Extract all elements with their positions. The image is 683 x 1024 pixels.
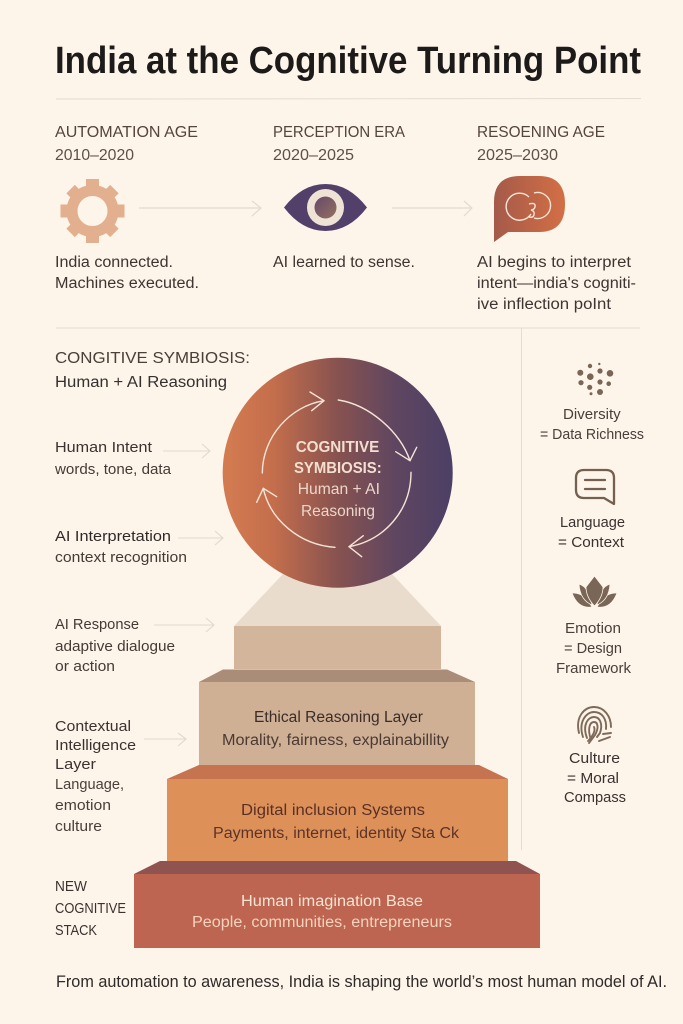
pyramid: digital inclusion systems: Digital inclusion Systems xyxy=(241,802,425,819)
sidebar: culture xyxy=(564,707,626,806)
icon: gear xyxy=(60,179,124,243)
dates: 2025–2030: 2025–2030 xyxy=(477,147,558,164)
timeline: automation age xyxy=(55,124,199,292)
label: AI interpretation: context recognition xyxy=(55,549,187,566)
label: AI response: or action xyxy=(55,658,115,675)
section heading: CONGITIVE SYMBIOSIS: xyxy=(55,350,250,367)
pyramid: ethical reasoning layer: Morality, fairness, explainabillity xyxy=(222,732,449,749)
sidebar: diversity xyxy=(540,363,644,443)
timeline: perception era xyxy=(273,124,415,271)
timeline: reasoning age xyxy=(477,124,636,313)
cognitive symbiosis orb xyxy=(223,358,453,588)
footer statement: From automation to awareness, India is shaping the world’s most human model of AI. xyxy=(56,973,667,991)
title: India at the Cognitive Turning Point xyxy=(55,40,641,82)
label: AI response: adaptive dialogue xyxy=(55,638,175,655)
sidebar: emotion: Framework xyxy=(556,661,632,677)
sidebar: language xyxy=(558,470,625,551)
heading: reasoning age: RESOENING AGE xyxy=(477,124,605,141)
pyramid: human imagination base: People, communities, entrepreneurs xyxy=(192,914,452,931)
pyramid: top block xyxy=(234,626,441,669)
icon: eye xyxy=(284,184,367,231)
label: AI interpretation: AI Interpretation xyxy=(55,528,171,545)
orb text: SYMBIOSIS: xyxy=(294,460,382,477)
icon: lotus xyxy=(572,576,617,607)
label: human intent xyxy=(54,439,210,478)
cycle arrows xyxy=(257,392,417,557)
sidebar: emotion xyxy=(556,576,632,677)
description xyxy=(477,254,636,313)
pyramid: digital inclusion systems: Payments, internet, identity Sta Ck xyxy=(213,825,459,842)
sidebar: culture: Culture xyxy=(569,751,620,767)
pyramid: human imagination base: Human imagination Base xyxy=(241,893,423,910)
arrow xyxy=(178,531,223,545)
pyramid: apex glow xyxy=(234,574,441,626)
pyramid: ethical reasoning layer: Ethical Reasoning Layer xyxy=(254,709,423,726)
label: contextual intelligence layer: Language, xyxy=(55,776,124,793)
pyramid: ethical reasoning layer xyxy=(199,670,475,765)
section heading: Human + AI Reasoning xyxy=(55,374,227,391)
label: new cognitive stack xyxy=(55,879,126,939)
label: AI response xyxy=(55,616,214,675)
heading: perception era: PERCEPTION ERA xyxy=(273,124,405,141)
description: AI learned to sense. xyxy=(273,254,415,271)
label: contextual intelligence layer: culture xyxy=(55,818,102,835)
sidebar: emotion: = Design xyxy=(564,641,622,657)
label: new cognitive stack: STACK xyxy=(55,923,97,939)
sidebar: diversity: Diversity xyxy=(563,407,621,423)
label: new cognitive stack: NEW xyxy=(55,879,87,895)
sidebar: culture: = Moral xyxy=(567,771,619,787)
label: new cognitive stack: COGNITIVE xyxy=(55,901,126,917)
description: intent—india's cogniti- xyxy=(477,275,636,292)
orb text: Human + AI xyxy=(298,481,380,498)
dates: 2020–2025: 2020–2025 xyxy=(273,147,354,164)
sidebar: language: = Context xyxy=(558,535,624,551)
description xyxy=(55,254,199,292)
icon: chat bubble xyxy=(576,470,614,504)
arrow xyxy=(163,444,210,458)
heading: automation age: AUTOMATION AGE xyxy=(55,124,198,141)
orb text: COGNITIVE xyxy=(296,439,380,456)
sidebar: culture: Compass xyxy=(564,790,626,806)
sidebar: emotion: Emotion xyxy=(565,621,621,637)
icon: data dots xyxy=(577,363,613,395)
label: contextual intelligence layer xyxy=(55,718,186,835)
description: Machines executed. xyxy=(55,275,199,292)
section heading xyxy=(55,350,250,391)
icon: fingerprint xyxy=(578,707,611,743)
label: contextual intelligence layer: Layer xyxy=(55,756,96,773)
pyramid: human imagination base xyxy=(134,861,540,948)
label: human intent: words, tone, data xyxy=(54,461,172,478)
arrow: automation to perception xyxy=(139,201,261,216)
orb text: Reasoning xyxy=(301,503,375,520)
sidebar: diversity: = Data Richness xyxy=(540,427,644,443)
label: contextual intelligence layer: Intelligence xyxy=(55,737,136,754)
arrow: perception to reasoning xyxy=(392,201,472,216)
label: contextual intelligence layer: Contextual xyxy=(55,718,131,735)
label: AI response: AI Response xyxy=(55,616,139,633)
arrow xyxy=(154,618,214,632)
description: ive inflection poInt xyxy=(477,296,612,313)
arrow xyxy=(144,733,186,746)
sidebar: language: Language xyxy=(560,515,625,531)
label: human intent: Human Intent xyxy=(55,439,153,456)
label: AI interpretation xyxy=(55,528,223,566)
description: India connected. xyxy=(55,254,173,271)
pyramid: digital inclusion systems xyxy=(167,765,508,861)
label: contextual intelligence layer: emotion xyxy=(55,797,111,814)
dates: 2010–2020: 2010–2020 xyxy=(55,147,134,164)
description: AI begins to interpret xyxy=(477,254,632,271)
orb text xyxy=(294,439,382,520)
icon: speech bubble with brain xyxy=(494,176,565,242)
